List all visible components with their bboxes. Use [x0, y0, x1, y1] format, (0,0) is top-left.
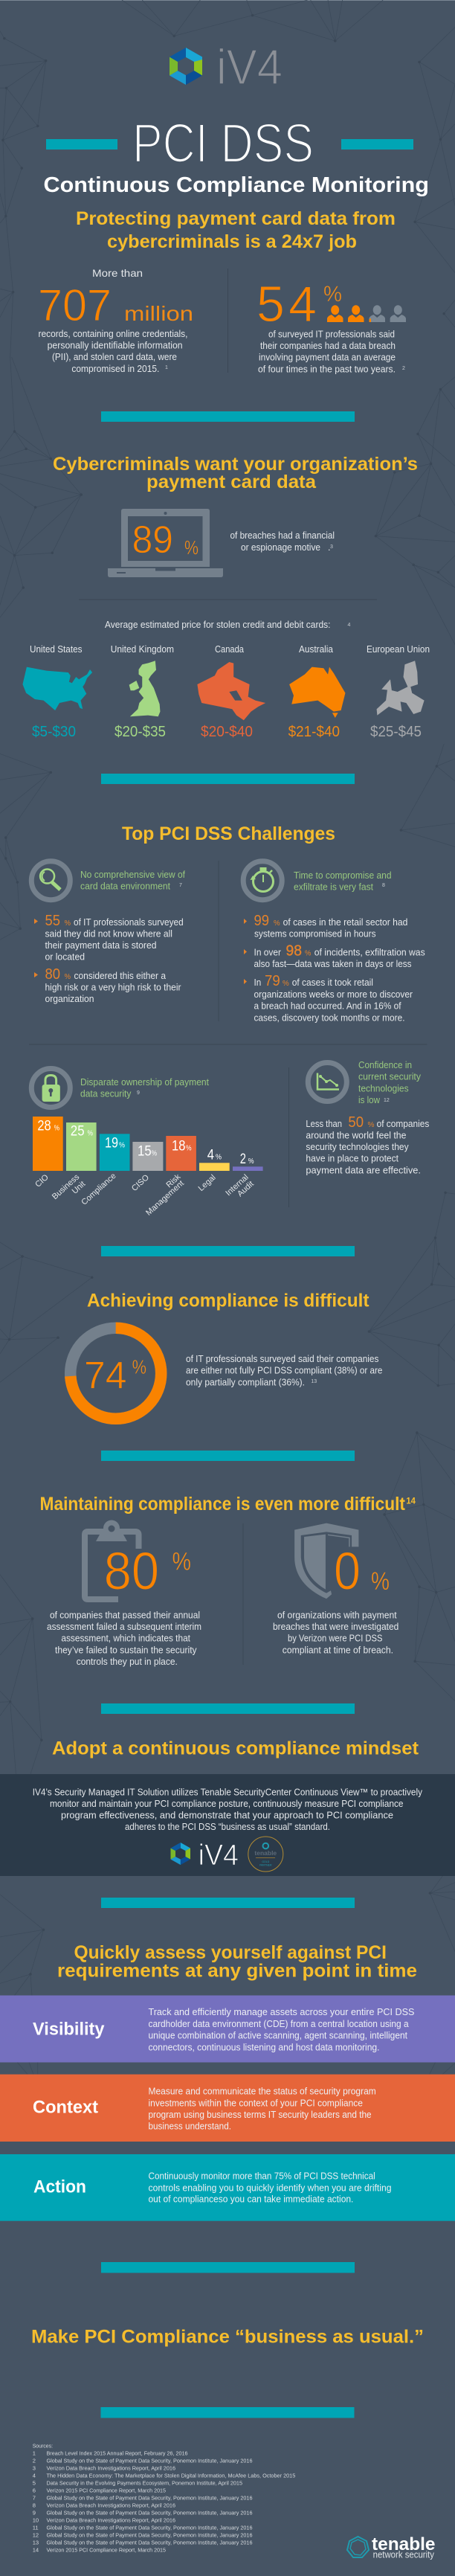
panel: action: Continuously monitor more than 75% of PCI DSS technical [149, 2171, 375, 2182]
panel: time to compromise: of cases it took retail [292, 977, 373, 988]
stat: shield 0 percent: 0 [334, 1543, 361, 1602]
panel: visibility: unique combination of active scanning, agent scanning, intelligent [149, 2031, 407, 2041]
bar chart: ownership by role: 28 [37, 1118, 51, 1134]
icon: magnifier [31, 861, 70, 900]
panel: confidence in security technologies: 12 [384, 1098, 390, 1103]
panel: time to compromise: exfiltrate is very fast [294, 882, 374, 893]
logo: tenable network security [347, 2534, 436, 2560]
panel: action: Action [33, 2177, 86, 2197]
section bar [101, 774, 355, 784]
icon: declining chart [308, 1062, 346, 1101]
heading: cybercriminals want your data: Cybercriminals want your organization’s [53, 454, 418, 475]
stat: clipboard 80 percent: of companies that passed their annual [50, 1610, 200, 1621]
heading: adopt a mindset: Adopt a continuous compliance mindset [52, 1738, 419, 1758]
text: IV4 solution: adheres to the PCI DSS “business as usual” standard. [125, 1822, 330, 1832]
logo: iV4 small: iV4 [199, 1839, 239, 1872]
sources list: Data Security in the Evolving Payments Ecosystem, Ponemon Institute, April 2015 [46, 2480, 242, 2487]
map: Canada: $20-$40 [201, 723, 253, 740]
bar chart: ownership by role: 2 [240, 1152, 246, 1167]
panel: visibility: cardholder data environment (CDE) from a central location using a [149, 2019, 409, 2029]
axis labels: Internal [224, 1173, 251, 1198]
axis labels: CIO [33, 1172, 51, 1189]
panel: no comprehensive view: high risk or a very high risk to their [45, 982, 181, 992]
stat: 707 million records: 1 [165, 365, 168, 370]
panel: time to compromise: Time to compromise and [294, 870, 392, 881]
heading: achieving compliance: Achieving compliance is difficult [87, 1291, 370, 1311]
heading: protecting payment card data: Protecting payment card data from [76, 208, 396, 229]
sources list: 6 [33, 2487, 36, 2494]
axis labels [33, 1172, 256, 1218]
sources list [33, 2443, 295, 2554]
map: United Kingdom [111, 644, 174, 740]
heading: cybercriminals want your data: payment card data [146, 472, 317, 492]
panel: visibility: Visibility [33, 2019, 105, 2039]
section bar [101, 1703, 355, 1714]
icon: clipboard [85, 1520, 138, 1599]
panel: time to compromise [243, 861, 425, 1023]
text: IV4 solution: monitor and maintain your PCI compliance posture, continuously measure PCI compliance [50, 1799, 404, 1809]
bar chart: ownership by role: 4 [207, 1148, 214, 1163]
panel: no comprehensive view: card data environment [80, 881, 170, 892]
section bar [101, 1246, 355, 1256]
stat: clipboard 80 percent: % [172, 1548, 191, 1576]
icon: laptop with 89 percent [108, 509, 223, 577]
sources list: Verizon Data Breach Investigations Report, April 2016 [46, 2465, 175, 2472]
sources list: The Hidden Data Economy: The Marketplace for Stolen Digital Information, McAfee Labs, October 2015 [46, 2473, 295, 2479]
stat: 54 percent with people icons: of four times in the past two years. [258, 364, 396, 375]
heading: top challenges: Top PCI DSS Challenges [122, 823, 335, 844]
bar chart: ownership by role [33, 1117, 263, 1218]
icon: shield [294, 1523, 358, 1599]
panel: time to compromise: also fast—data was taken in days or less [254, 959, 412, 969]
panel: confidence in security technologies: security technologies they [306, 1142, 409, 1152]
map: European Union: $25-$45 [370, 723, 422, 740]
text: breaches motive [230, 530, 335, 553]
panel: context: Context [33, 2098, 98, 2118]
stat: 707 million records: (PII), and stolen card data, were [52, 352, 177, 362]
panel: no comprehensive view: 80 [45, 966, 60, 983]
panel: visibility: connectors, continuous listening and host data monitoring. [149, 2042, 379, 2052]
heading: quickly assess: Quickly assess yourself against PCI [74, 1942, 387, 1963]
panel: action: controls enabling you to quickly identify when you are drifting [149, 2182, 392, 2193]
logo: iV4 small [171, 1839, 239, 1872]
bar chart: ownership by role: 25 [71, 1124, 85, 1140]
stat: 54 percent with people icons: involving payment data an average [259, 353, 396, 363]
panel: disparate ownership: data security [80, 1089, 132, 1099]
panel: time to compromise: of incidents, exfiltration was [314, 948, 425, 958]
panel: confidence in security technologies: around the world feel the [306, 1131, 406, 1141]
panel: no comprehensive view: 55 [45, 913, 60, 929]
stat: 707 million records: More than [92, 267, 143, 279]
logo: tenable network security: network security [373, 2548, 434, 2560]
sources list: 13 [33, 2540, 39, 2546]
heading: maintaining compliance: Maintaining compliance is even more difficult [40, 1494, 406, 1515]
sources list: Global Study on the State of Payment Data Security, Ponemon Institute, January 2016 [46, 2458, 253, 2464]
sources list: 4 [33, 2473, 36, 2479]
stat: shield 0 percent: compliant at time of breach. [283, 1645, 393, 1655]
heading: protecting payment card data [76, 208, 396, 252]
stat: 707 million records: million [124, 302, 193, 325]
text: compliance explanation: are either not fully PCI DSS compliant (38%) or are [186, 1366, 382, 1376]
panel: confidence in security technologies: have in place to protect [306, 1154, 399, 1164]
text: IV4 solution [33, 1787, 423, 1832]
map: United States: United States [30, 644, 82, 655]
panel: time to compromise: In [254, 977, 261, 988]
text: breaches motive: or espionage motive [241, 542, 320, 553]
text: breaches motive: 3 [330, 545, 333, 550]
panel: action [0, 2154, 455, 2221]
stat: clipboard 80 percent: 80 [104, 1543, 159, 1602]
panel: time to compromise: organizations weeks or more to discover [254, 989, 413, 1000]
chart: 74 percent donut [71, 1328, 161, 1419]
sources list: Global Study on the State of Payment Data Security, Ponemon Institute, January 2016 [46, 2540, 253, 2546]
panel: confidence in security technologies [306, 1060, 429, 1175]
axis labels: Management [144, 1179, 186, 1218]
sources list: 11 [33, 2525, 39, 2531]
map: United Kingdom: $20-$35 [114, 723, 166, 740]
sources list: Global Study on the State of Payment Data Security, Ponemon Institute, January 2016 [46, 2532, 253, 2539]
icon: stopwatch [243, 861, 282, 900]
sources list: Verizon 2015 PCI Compliance Report, March 2015 [46, 2487, 166, 2494]
sources list: Breach Level Index 2015 Annual Report, February 26, 2016 [46, 2450, 187, 2457]
panel: confidence in security technologies: % [367, 1121, 375, 1129]
chart: 74 percent donut: % [132, 1356, 146, 1378]
sources list: Verizon 2015 PCI Compliance Report, March 2015 [46, 2547, 166, 2554]
stat: clipboard 80 percent: they’ve failed to sustain the security [55, 1645, 197, 1655]
panel: no comprehensive view: of IT professionals surveyed [74, 917, 184, 928]
bar chart: ownership by role: % [54, 1124, 59, 1132]
panel: no comprehensive view: said they did not know where all [45, 928, 172, 939]
stat: shield 0 percent: of organizations with payment [277, 1610, 397, 1621]
map: Canada: Canada [215, 644, 244, 655]
bar chart: ownership by role: % [248, 1157, 254, 1166]
text: compliance explanation: 13 [311, 1379, 317, 1384]
stat: 54 percent with people icons [256, 276, 406, 375]
map: United States [22, 644, 92, 740]
logo: iV4 header [170, 39, 283, 95]
panel: time to compromise: 99 [254, 913, 269, 929]
panel: no comprehensive view: % [65, 919, 71, 928]
stat: clipboard 80 percent [47, 1520, 201, 1667]
panel: no comprehensive view: 7 [179, 883, 182, 888]
panel: context: Measure and communicate the status of security program [149, 2087, 376, 2097]
bar chart: ownership by role: % [88, 1130, 93, 1138]
stat: shield 0 percent: % [371, 1567, 390, 1596]
panel: disparate ownership [31, 1068, 263, 1218]
sources list: 8 [33, 2502, 36, 2509]
title: PCI DSS: PCI DSS [132, 112, 314, 174]
chart: 74 percent donut: 74 [84, 1355, 127, 1398]
panel: time to compromise: a breach had occurred. And in 16% of [254, 1001, 401, 1012]
map: Australia [288, 644, 345, 740]
icon: lock [31, 1068, 70, 1107]
map: Canada [197, 644, 265, 740]
panel: no comprehensive view: their payment data is stored [45, 940, 157, 951]
stat: clipboard 80 percent: controls they put in place. [77, 1657, 178, 1667]
panel: disparate ownership: Disparate ownership of payment [80, 1077, 210, 1088]
stat: shield 0 percent: by Verizon were PCI DSS [288, 1634, 382, 1644]
sources list: 10 [33, 2517, 39, 2524]
panel: confidence in security technologies: 50 [348, 1114, 364, 1131]
text: IV4 solution: IV4’s Security Managed IT Solution utilizes Tenable SecurityCenter Continuous View™ to proactively [33, 1787, 423, 1797]
sources list: 2 [33, 2458, 36, 2464]
stat: 54 percent with people icons: of surveyed IT professionals said [268, 329, 395, 339]
map: European Union [367, 644, 430, 740]
stat: 54 percent with people icons: their companies had a data breach [260, 341, 396, 351]
bar chart: ownership by role: 18 [172, 1139, 185, 1154]
axis labels: Compliance [80, 1172, 118, 1207]
panel: confidence in security technologies: is low [358, 1095, 381, 1105]
subtitle: Continuous Compliance Monitoring [43, 173, 429, 197]
text: average estimated price: Average estimated price for stolen credit and debit cards: [105, 620, 330, 630]
panel: context [0, 2075, 455, 2142]
bar chart: ownership by role: 19 [105, 1136, 118, 1152]
panel: time to compromise: 98 [285, 943, 302, 960]
map: Australia: $21-$40 [288, 723, 340, 740]
panel: time to compromise: % [305, 950, 311, 958]
panel: confidence in security technologies: of companies [377, 1119, 429, 1129]
text: compliance explanation [186, 1354, 382, 1387]
dark band: IV4 solution panel [0, 1774, 455, 1876]
section bar [101, 2262, 355, 2273]
panel: confidence in security technologies: payment data are effective. [306, 1165, 421, 1175]
badge: tenable gold partner [248, 1837, 283, 1872]
section bar [101, 1898, 355, 1908]
bar chart: ownership by role: % [119, 1142, 125, 1150]
stat: 707 million records [38, 267, 193, 374]
panel: time to compromise: cases, discovery took months or more. [254, 1012, 404, 1023]
section bar [101, 1451, 355, 1461]
icon: people [327, 305, 406, 322]
map: Australia: Australia [299, 644, 333, 655]
map: United Kingdom: United Kingdom [111, 644, 174, 655]
heading: quickly assess: requirements at any given point in time [57, 1961, 417, 1982]
panel: action: out of complianceso you can take immediate action. [149, 2194, 353, 2205]
panel: time to compromise: of cases in the retail sector had [283, 917, 407, 928]
heading: quickly assess [57, 1942, 417, 1982]
panel: time to compromise: In over [254, 948, 281, 958]
sources list: 14 [33, 2547, 39, 2554]
bar chart: ownership by role: 15 [138, 1143, 152, 1159]
text: breaches motive: . [328, 542, 330, 553]
heading: protecting payment card data: cybercriminals is a 24x7 job [107, 231, 357, 252]
axis labels: Audit [236, 1180, 256, 1198]
sources list: 9 [33, 2510, 36, 2516]
map: United States: $5-$30 [32, 723, 76, 740]
logo: iV4 header: iV4 [216, 39, 283, 95]
panel: no comprehensive view: % [65, 973, 71, 981]
sources list: Global Study on the State of Payment Data Security, Ponemon Institute, January 2016 [46, 2525, 253, 2531]
badge: tenable gold partner: GOLD [262, 1860, 270, 1863]
text: IV4 solution: program effectiveness, and demonstrate that your approach to PCI compliance [61, 1810, 393, 1820]
axis labels: CISO [130, 1173, 151, 1193]
panel: no comprehensive view: organization [45, 994, 94, 1004]
sources list: 3 [33, 2465, 36, 2472]
stat: clipboard 80 percent: assessment failed a subsequent interim [47, 1622, 201, 1632]
text: compliance explanation: only partially compliant (36%). [186, 1377, 305, 1387]
sources list: Verizon Data Breach Investigations Report, April 2016 [46, 2517, 175, 2524]
badge: tenable gold partner: PARTNER [259, 1864, 272, 1867]
text: compliance explanation: of IT professionals surveyed said their companies [186, 1354, 378, 1364]
sources list: Verizon Data Breach Investigations Report, April 2016 [46, 2502, 175, 2509]
panel: time to compromise: % [274, 919, 280, 928]
stat: 707 million records: personally identifiable information [48, 341, 183, 351]
panel: context: business understand. [149, 2121, 231, 2132]
stat: shield 0 percent [273, 1523, 398, 1655]
axis labels: Legal [197, 1173, 218, 1193]
section bar [101, 2407, 354, 2418]
badge: tenable gold partner: tenable [254, 1849, 277, 1857]
bar chart: ownership by role: % [152, 1149, 157, 1157]
sources list: 12 [33, 2532, 39, 2539]
panel: time to compromise: systems compromised in hours [254, 928, 376, 939]
panel: time to compromise: % [283, 980, 289, 988]
section bar [101, 411, 355, 422]
panel: confidence in security technologies: Less than [306, 1119, 342, 1129]
sources list: Global Study on the State of Payment Data Security, Ponemon Institute, January 2016 [46, 2510, 253, 2516]
panel: disparate ownership: 9 [137, 1091, 140, 1096]
panel: context: program using business terms IT security leaders and the [149, 2110, 372, 2120]
map: European Union: European Union [367, 644, 430, 655]
stat: clipboard 80 percent: assessment, which indicates that [61, 1634, 190, 1644]
icon: laptop with 89 percent: 89 [132, 518, 173, 562]
heading: make PCI compliance business as usual: Make PCI Compliance “business as usual.” [31, 2326, 424, 2347]
bar chart: ownership by role: % [186, 1145, 192, 1153]
stat: 707 million records: 707 [38, 280, 112, 330]
stat: 54 percent with people icons: % [323, 282, 342, 306]
panel: no comprehensive view: considered this either a [74, 971, 166, 981]
panel: confidence in security technologies: current security [358, 1072, 422, 1082]
panel: no comprehensive view: No comprehensive view of [80, 870, 185, 880]
panel: confidence in security technologies: technologies [358, 1083, 409, 1093]
title accent bars [46, 139, 413, 150]
text: breaches motive: of breaches had a financial [230, 530, 335, 541]
panel: context: investments within the context of your PCI compliance [149, 2098, 363, 2108]
stat: 707 million records: compromised in 2015. [71, 364, 159, 374]
panel: visibility: Track and efficiently manage assets across your entire PCI DSS [149, 2007, 414, 2017]
heading: cybercriminals want your data [53, 454, 418, 492]
panel: time to compromise: 8 [382, 883, 385, 888]
sources list: 5 [33, 2480, 36, 2487]
panel: confidence in security technologies: Confidence in [358, 1060, 412, 1070]
sources list: Global Study on the State of Payment Data Security, Ponemon Institute, January 2016 [46, 2495, 253, 2502]
panel: visibility [0, 1995, 455, 2062]
icon: laptop with 89 percent: % [184, 536, 199, 559]
axis labels: Unit [71, 1180, 87, 1196]
heading: maintaining compliance: 14 [406, 1496, 416, 1506]
price maps by region [22, 644, 430, 740]
text: average estimated price: 4 [348, 623, 351, 628]
panel: no comprehensive view [31, 861, 185, 1004]
logo: tenable network security: tenable [372, 2534, 436, 2554]
sources list: 7 [33, 2495, 36, 2502]
stat: 54 percent with people icons: 54 [256, 276, 317, 333]
stat: 54 percent with people icons: 2 [402, 366, 405, 371]
axis labels: Business [51, 1172, 82, 1201]
panel: no comprehensive view: or located [45, 952, 85, 963]
sources list: 1 [33, 2450, 36, 2457]
axis labels: Risk [164, 1172, 183, 1189]
stat: shield 0 percent: breaches that were investigated [273, 1622, 398, 1632]
bar chart: ownership by role: % [216, 1154, 222, 1162]
sources list: Sources: [33, 2443, 53, 2450]
panel: time to compromise: 79 [265, 973, 280, 989]
stat: 707 million records: records, containing online credentials, [39, 329, 187, 339]
